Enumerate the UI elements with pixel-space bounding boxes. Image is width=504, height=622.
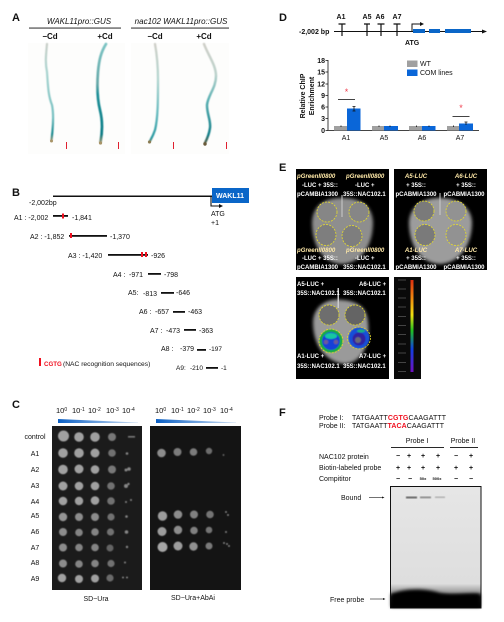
gel image — [390, 486, 481, 608]
fragment A3: A3 : -1,420 — [68, 253, 102, 260]
condition table: − — [408, 476, 412, 483]
condition table: 50x — [420, 476, 427, 481]
leaf image 3 with luminescence: 35S::NAC102.1 — [343, 364, 386, 370]
y axis and ticks: 15 — [317, 70, 325, 76]
legend: CGTG recognition sequence: (NAC recognition sequences) — [63, 361, 150, 368]
fragment A4: -798 — [164, 272, 178, 279]
leaf image 1: -LUC + — [355, 256, 375, 262]
heading C: C — [12, 399, 20, 411]
dilution labels, right: -4 — [228, 407, 233, 413]
fragment A3: -926 — [151, 253, 165, 260]
promoter diagram with WAKL11 box: ATG — [211, 211, 225, 218]
dilution labels, left: -3 — [114, 407, 119, 413]
fragment A9: -210 — [190, 365, 203, 372]
row labels — [24, 434, 46, 583]
fragment A6: -657 — [155, 309, 169, 316]
Bound marker — [341, 495, 384, 502]
probe sequences: Probe I: — [319, 415, 344, 422]
leaf image 1: pCAMBIA1300 — [297, 265, 339, 271]
leaf image 3 with luminescence: 35S::NAC102.1 — [297, 291, 340, 297]
row labels: A1 — [31, 451, 39, 458]
fragment A9: -1 — [221, 365, 227, 372]
condition table: + — [421, 453, 425, 460]
gene diagram: A6 — [376, 14, 385, 21]
dilution labels, left: -4 — [130, 407, 135, 413]
dilution labels, right: 10 — [203, 406, 211, 415]
condition table: + — [421, 465, 425, 472]
leaf image 2: A7-LUC — [454, 247, 478, 254]
plate captions: SD−Ura+AbAi — [171, 595, 215, 602]
heading F: F — [279, 407, 286, 419]
fragment A9 — [176, 365, 227, 372]
gene diagram: ATG — [405, 40, 420, 47]
y axis and ticks: 12 — [317, 82, 325, 88]
dilution labels, right: 10 — [155, 406, 163, 415]
leaf image 2: pCABMIA1300 — [395, 192, 437, 198]
probe headers — [391, 438, 478, 448]
gene diagram: -2,002 bp — [299, 29, 329, 36]
panel A: GUS staining of roots — [12, 12, 229, 154]
fragment A3 — [68, 252, 165, 260]
leaf image 1: -LUC + 35S:: — [302, 183, 338, 189]
dilution labels, right: 0 — [163, 407, 166, 413]
gene diagram: A7 — [393, 14, 402, 21]
dilution labels, left: -2 — [96, 407, 101, 413]
probe sequences: TATGAATTTACACAAGATTT — [352, 423, 445, 430]
dilution labels, right: -1 — [179, 407, 184, 413]
Bound marker: Bound — [341, 495, 361, 502]
error bars — [341, 106, 468, 127]
x labels: A7 — [456, 135, 464, 142]
fragment A9: A9: — [176, 365, 186, 372]
plate captions — [83, 595, 215, 603]
leaf image 3 with luminescence: A7-LUC + — [359, 354, 387, 360]
promoter diagram with WAKL11 box — [29, 188, 249, 227]
leaf image 2: pCABMIA1300 — [443, 192, 485, 198]
legend — [407, 60, 453, 77]
row labels: A2 — [31, 467, 39, 474]
dilution labels, right: -3 — [211, 407, 216, 413]
fragment A6 — [139, 309, 202, 316]
y axis and ticks: 9 — [321, 93, 325, 100]
dilution wedges — [58, 419, 236, 423]
dilution labels, left: 10 — [106, 406, 114, 415]
condition table: + — [407, 465, 411, 472]
y axis and ticks: 6 — [321, 104, 325, 112]
root images — [28, 43, 229, 154]
leaf image 1: 35S::NAC102.1 — [343, 265, 386, 271]
condition table: − — [396, 453, 400, 460]
plate: SD-Ura — [52, 426, 142, 590]
dilution labels, right: 10 — [171, 406, 179, 415]
gene diagram: A5 — [363, 14, 372, 21]
condition table: + — [396, 465, 400, 472]
y axis and ticks: 3 — [321, 116, 325, 123]
fragment A4: A4 : — [113, 272, 126, 279]
treatment labels: +Cd — [196, 32, 212, 41]
dilution labels, left: 10 — [122, 406, 130, 415]
promoter diagram with WAKL11 box: -2,002bp — [29, 200, 57, 207]
treatment labels: −Cd — [147, 32, 163, 41]
dilution labels, left: 10 — [56, 406, 64, 415]
probe headers: Probe I — [406, 438, 428, 445]
leaf image 1: pGreenII0800 — [296, 173, 336, 180]
leaf image 2: + 35S:: — [406, 256, 426, 262]
dilution labels, right — [155, 406, 233, 415]
leaf image 1: 35S::NAC102.1 — [343, 192, 386, 198]
plate captions: SD−Ura — [83, 596, 109, 603]
legend: COM lines — [420, 70, 453, 77]
fragment A5: A5: — [128, 290, 139, 297]
leaf image 3 with luminescence — [296, 277, 389, 379]
y axis title — [300, 73, 316, 118]
probe sequences: Probe II: — [319, 423, 346, 430]
legend: CGTG recognition sequence — [39, 358, 150, 368]
row labels: control — [24, 434, 46, 441]
condition table: + — [469, 465, 473, 472]
probe sequences — [319, 415, 447, 430]
panel C: yeast one-hybrid spot assay — [12, 399, 241, 603]
dilution labels, left — [56, 406, 135, 415]
colour scale bar — [394, 277, 421, 379]
fragment A8: -197 — [209, 346, 222, 353]
Free probe marker: Free probe — [330, 597, 364, 604]
condition table: + — [407, 453, 411, 460]
condition table: Biotin-labeled probe — [319, 465, 381, 472]
condition table: + — [454, 465, 458, 472]
significance marks: * — [345, 87, 349, 97]
leaf image 1: -LUC + — [355, 183, 375, 189]
significance marks — [338, 87, 470, 116]
fragment A5 — [128, 290, 190, 298]
fragment A2: A2 : -1,852 — [30, 234, 64, 241]
leaf image 3 with luminescence: A5-LUC + — [297, 282, 325, 288]
probe sequences: TATGAATTCGTGCAAGATTT — [352, 415, 447, 422]
leaf image 2: A1-LUC — [404, 247, 428, 254]
leaf image 2 — [394, 169, 487, 271]
row labels: A4 — [31, 499, 39, 506]
leaf image 1: pGreenII0800 — [296, 247, 336, 254]
leaf image 3 with luminescence: 35S::NAC102.1 — [297, 364, 340, 370]
leaf image 2: + 35S:: — [456, 256, 476, 262]
dilution labels, right: 10 — [220, 406, 228, 415]
plate: SD-Ura+AbAi — [150, 426, 241, 590]
gene diagram — [299, 14, 487, 47]
row labels: A9 — [31, 576, 39, 583]
y axis and ticks: 18 — [317, 58, 325, 65]
condition table — [319, 453, 473, 483]
treatment labels: −Cd — [42, 32, 58, 41]
legend: CGTG recognition sequence: CGTG — [44, 361, 62, 368]
fragment A7: A7 : — [150, 328, 163, 335]
fragment A6: A6 : — [139, 309, 152, 316]
fragment A7: -363 — [199, 328, 213, 335]
probe headers: Probe II — [451, 438, 475, 445]
legend: WT — [420, 61, 432, 68]
promoter diagram with WAKL11 box: +1 — [211, 220, 219, 227]
fragment A8: A8 : — [161, 346, 174, 353]
treatment labels — [42, 32, 212, 41]
leaf image 2: A6-LUC — [454, 173, 478, 180]
row labels: A8 — [31, 560, 39, 567]
row labels: A7 — [31, 545, 39, 552]
leaf image 3 with luminescence: A1-LUC + — [297, 354, 325, 360]
leaf image 2: pCABMIA1300 — [395, 265, 437, 271]
y axis title: Relative ChIP — [300, 73, 307, 118]
y axis title: Enrichment — [309, 76, 316, 115]
x labels — [342, 135, 464, 142]
dilution labels, left: -1 — [80, 407, 85, 413]
genotype label: WAKL11pro::GUS — [29, 17, 121, 28]
dilution labels, left: 10 — [88, 406, 96, 415]
leaf image 1: pGreenII0800 — [345, 173, 385, 180]
bar chart — [300, 58, 479, 142]
genotype label: WAKL11pro::GUS: WAKL11pro::GUS — [47, 17, 112, 26]
leaf image 3 with luminescence: 35S::NAC102.1 — [343, 291, 386, 297]
panel E: luciferase imaging — [279, 162, 487, 379]
fragment A1 — [14, 214, 92, 222]
fragment A7 — [150, 328, 213, 335]
y axis and ticks: 0 — [321, 128, 325, 135]
condition table: − — [396, 476, 400, 483]
panel D: ChIP enrichment — [279, 12, 487, 142]
dilution labels, right: 10 — [187, 406, 195, 415]
dilution labels, left: 0 — [64, 407, 67, 413]
condition table: − — [454, 476, 458, 483]
treatment labels: +Cd — [97, 32, 113, 41]
significance marks: * — [459, 103, 463, 113]
leaf image 1: pGreenII0800 — [345, 247, 385, 254]
x labels: A5 — [380, 135, 388, 142]
y axis and ticks — [317, 58, 479, 135]
condition table: 500x — [433, 476, 442, 481]
condition table: NAC102 protein — [319, 454, 369, 461]
heading D: D — [279, 12, 287, 24]
bars — [334, 108, 473, 130]
fragment A2: -1,370 — [110, 234, 130, 241]
fragment A4 — [113, 272, 178, 279]
condition table: − — [469, 476, 473, 483]
row labels: A5 — [31, 513, 39, 520]
panel B: promoter fragments — [12, 187, 249, 372]
condition table: Compititor — [319, 476, 352, 483]
condition table: + — [436, 465, 440, 472]
leaf image 1 — [296, 169, 389, 271]
fragment A8 — [161, 346, 222, 353]
fragment A4: -971 — [129, 272, 143, 279]
gene diagram: A1 — [337, 14, 346, 21]
leaf image 1: -LUC + 35S:: — [302, 256, 338, 262]
dilution labels, left: 10 — [72, 406, 80, 415]
fragment A1: -1,841 — [72, 215, 92, 222]
fragment A7: -473 — [166, 328, 180, 335]
leaf image 2: pCABMIA1300 — [443, 265, 485, 271]
genotype label: nac102 WAKL11pro::GUS: nac102 WAKL11pro::GUS — [135, 17, 228, 26]
condition table: + — [469, 453, 473, 460]
fragment A1: A1 : -2,002 — [14, 215, 48, 222]
fragment A5: -813 — [143, 291, 157, 298]
promoter diagram with WAKL11 box: WAKL11 — [216, 193, 244, 200]
fragment A2 — [30, 233, 130, 241]
heading E: E — [279, 162, 286, 174]
x labels: A1 — [342, 135, 350, 142]
heading B: B — [12, 187, 20, 199]
leaf image 2: + 35S:: — [406, 183, 426, 189]
condition table: + — [436, 453, 440, 460]
fragment A8: -379 — [180, 346, 194, 353]
row labels: A6 — [31, 529, 39, 536]
dilution labels, right: -2 — [195, 407, 200, 413]
fragment A6: -463 — [188, 309, 202, 316]
x labels: A6 — [418, 135, 426, 142]
scale bars — [66, 142, 227, 149]
leaf image 2: A5-LUC — [404, 173, 428, 180]
leaf image 1: pCAMBIA1300 — [297, 192, 339, 198]
leaf image 2: + 35S:: — [456, 183, 476, 189]
Free probe marker — [330, 597, 386, 604]
row labels: A3 — [31, 483, 39, 490]
panel F: EMSA — [279, 407, 481, 608]
condition table: − — [454, 453, 458, 460]
fragment A5: -646 — [176, 290, 190, 297]
leaf image 3 with luminescence: A6-LUC + — [359, 282, 387, 288]
heading A: A — [12, 12, 20, 24]
